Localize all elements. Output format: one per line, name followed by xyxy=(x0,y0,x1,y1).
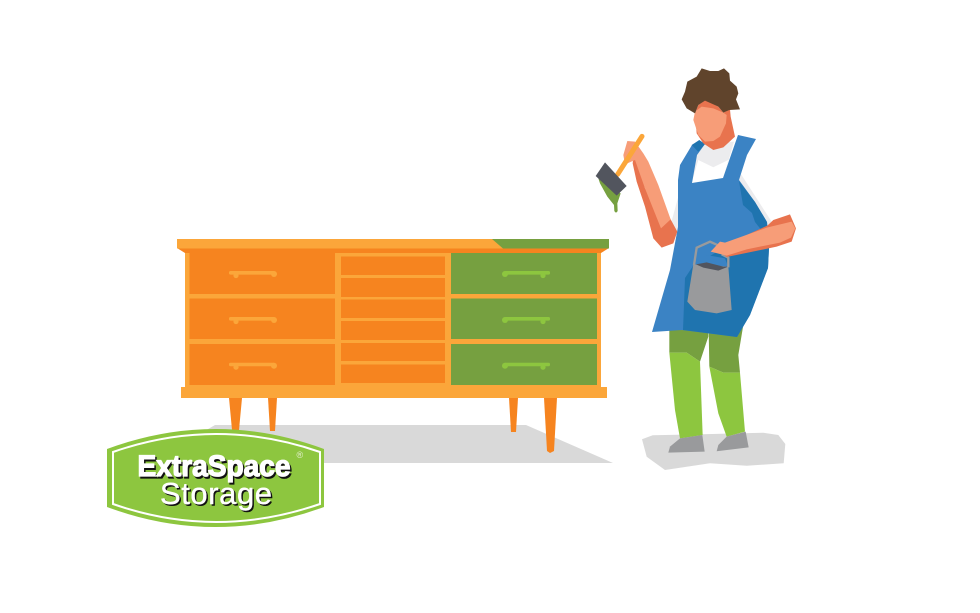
left drawer handles xyxy=(229,271,277,370)
raised arm xyxy=(623,141,677,248)
logo text xyxy=(138,450,290,511)
logo: Extra Space Storage xyxy=(107,429,324,527)
bucket handle xyxy=(694,242,728,267)
logo text: Storage xyxy=(160,476,272,511)
person xyxy=(596,68,796,453)
apron strap shadow xyxy=(692,140,705,152)
shoes xyxy=(668,432,749,453)
dresser legs xyxy=(229,398,557,453)
logo text shadow xyxy=(139,452,292,512)
logo inner border xyxy=(113,434,320,522)
ground shadow under person xyxy=(642,433,785,470)
face xyxy=(693,107,727,142)
logo badge xyxy=(107,429,324,527)
brush paint drip xyxy=(598,178,621,213)
logo text shadow: Storage xyxy=(162,478,274,512)
bucket body xyxy=(687,264,732,313)
paint bucket xyxy=(687,242,732,313)
bucket rim xyxy=(696,262,728,271)
left trouser leg xyxy=(669,310,708,438)
registered mark: ® xyxy=(296,450,304,460)
dresser top xyxy=(177,239,609,248)
middle orange drawers xyxy=(341,256,445,383)
shirt collar highlight xyxy=(692,160,728,183)
logo text: ExtraSpace xyxy=(138,450,290,483)
dresser xyxy=(177,239,609,453)
brush handle xyxy=(618,136,642,174)
apron shaded side xyxy=(683,181,769,337)
paint brush xyxy=(596,136,642,213)
left orange drawers xyxy=(190,253,335,385)
right drawer handles xyxy=(502,271,550,370)
holding arm xyxy=(711,214,796,257)
dresser top shadow strip xyxy=(177,248,609,253)
right painted green drawers xyxy=(451,253,597,385)
white shirt xyxy=(671,142,772,233)
brush head xyxy=(596,162,627,196)
logo text shadow: ExtraSpace xyxy=(139,452,292,485)
dresser floor shadow xyxy=(150,425,613,463)
neck and forehead shadow xyxy=(695,100,735,150)
right trouser leg xyxy=(708,310,745,437)
painted part of dresser top xyxy=(492,239,609,248)
dresser body xyxy=(185,250,601,388)
base rail xyxy=(181,387,607,398)
apron xyxy=(652,135,769,337)
bucket inside xyxy=(696,255,728,267)
hair xyxy=(682,68,740,113)
